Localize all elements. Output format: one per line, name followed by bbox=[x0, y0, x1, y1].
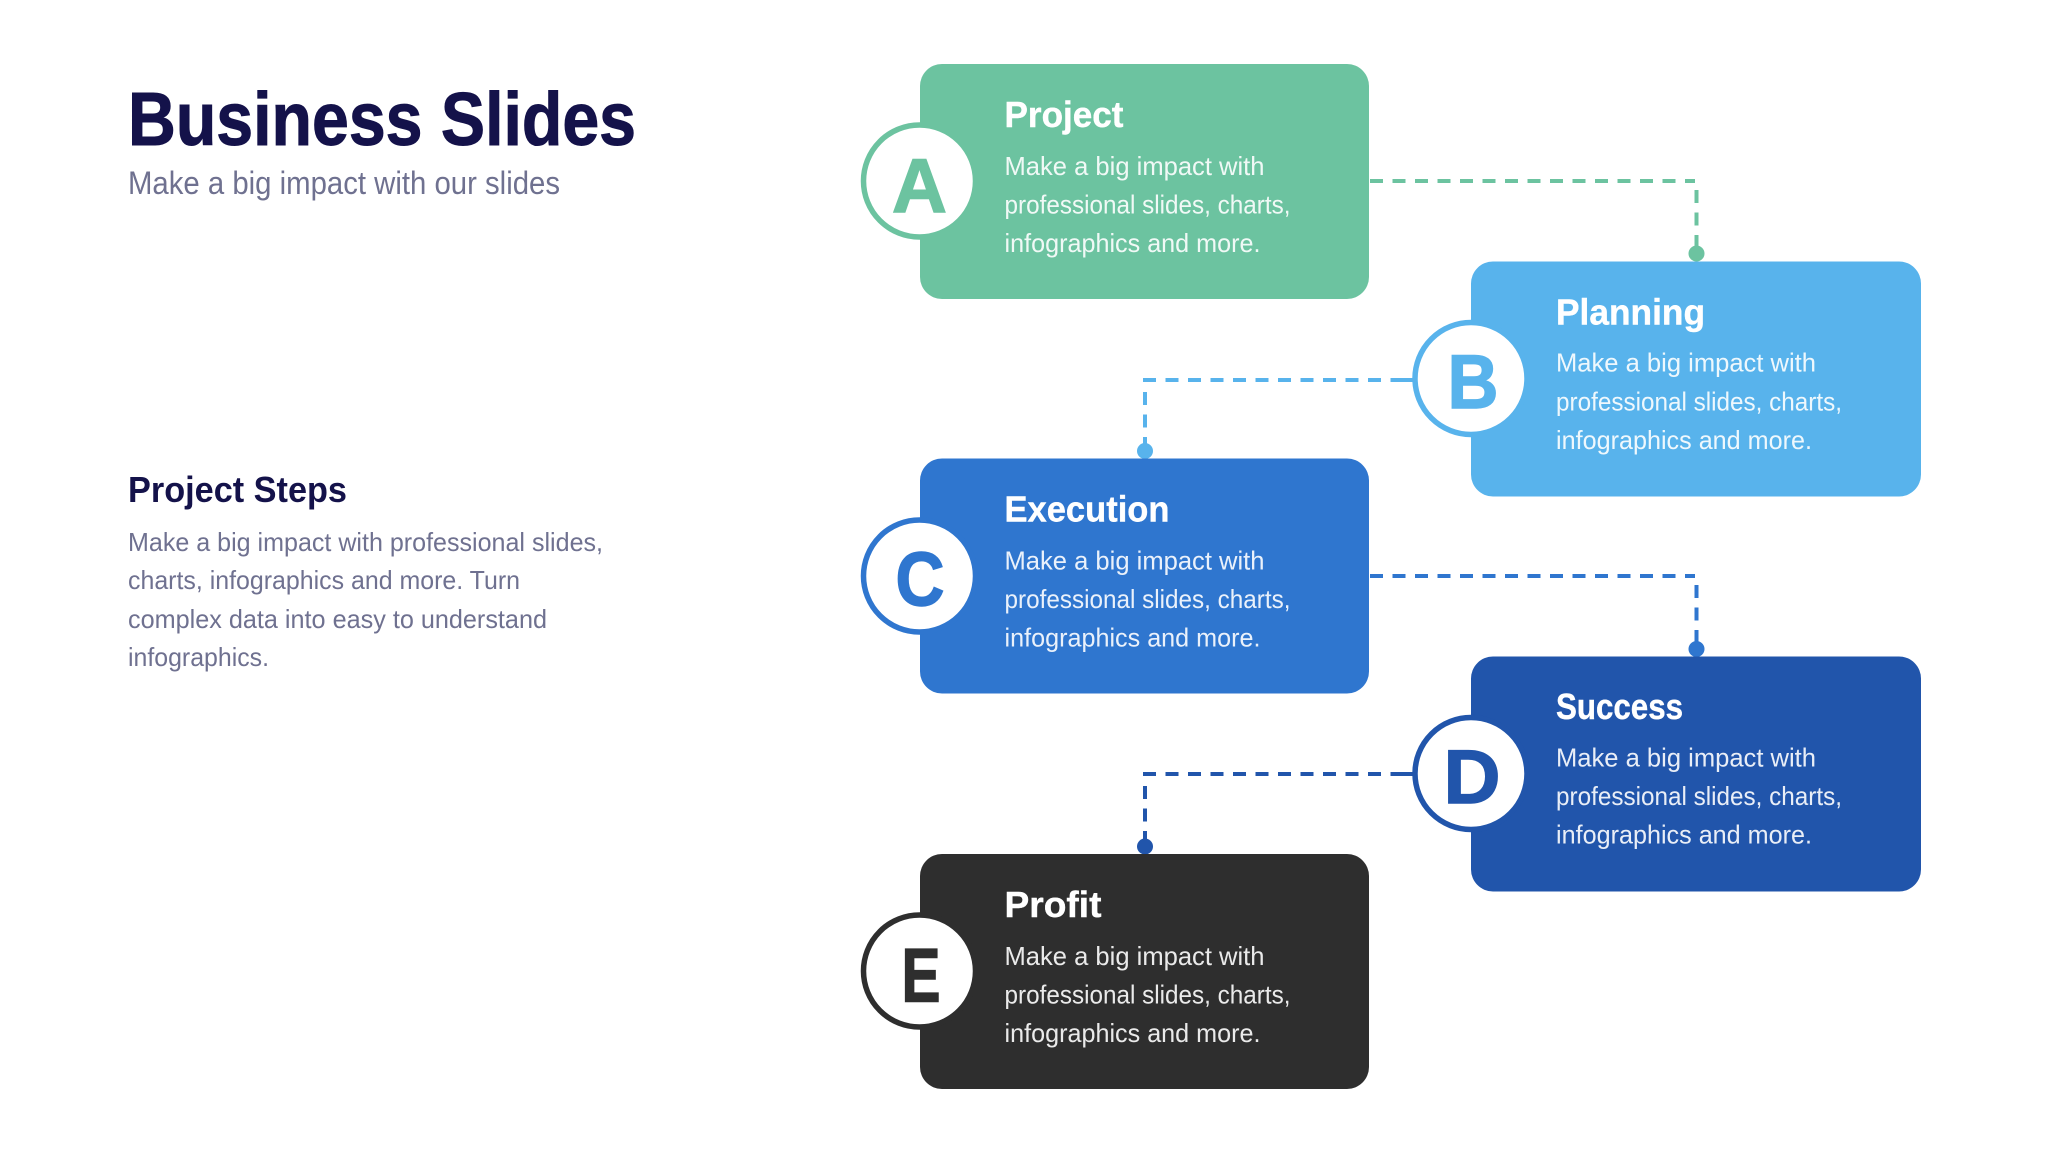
card text: success bbox=[1556, 742, 1842, 850]
arrow: planning to execution bbox=[1137, 380, 1414, 459]
card text: project: infographics and more. bbox=[1004, 228, 1260, 258]
text block: project steps description: infographics. bbox=[128, 642, 269, 672]
card text: execution: professional slides, charts, bbox=[1004, 584, 1290, 614]
card text: execution bbox=[1004, 546, 1290, 652]
card text: planning: infographics and more. bbox=[1556, 425, 1812, 455]
arrow: success to profit bbox=[1137, 774, 1414, 854]
icon: letter A badge bbox=[864, 125, 976, 237]
icon: letter C badge: C bbox=[896, 538, 944, 622]
card text: success: Make a big impact with bbox=[1556, 742, 1816, 772]
card text: planning: Make a big impact with bbox=[1556, 348, 1816, 378]
card text: execution: Make a big impact with bbox=[1004, 546, 1264, 576]
subtitle: Make a big impact with our slides bbox=[128, 165, 560, 201]
panel: planning bbox=[1415, 262, 1921, 496]
card text: profit: professional slides, charts, bbox=[1004, 980, 1290, 1010]
card text: planning bbox=[1556, 348, 1842, 455]
panel: project bbox=[864, 64, 1369, 299]
text block: project steps description: charts, infographics and more. Turn bbox=[128, 565, 520, 595]
icon: letter B badge: B bbox=[1448, 340, 1498, 425]
card text: profit: Make a big impact with bbox=[1004, 941, 1264, 971]
card text: success: infographics and more. bbox=[1556, 820, 1812, 850]
icon: letter C badge bbox=[864, 520, 976, 632]
title: Business Slides bbox=[128, 77, 636, 161]
text block: project steps description: complex data into easy to understand bbox=[128, 604, 547, 634]
card text: execution: infographics and more. bbox=[1004, 622, 1260, 652]
icon: letter A badge: A bbox=[892, 144, 947, 229]
arrow: execution to success bbox=[1370, 576, 1704, 657]
card text: success: professional slides, charts, bbox=[1556, 781, 1842, 811]
card text: project: professional slides, charts, bbox=[1004, 190, 1290, 220]
card text: profit bbox=[1004, 941, 1290, 1048]
card text: project bbox=[1004, 151, 1290, 258]
icon: letter B badge bbox=[1415, 322, 1527, 434]
card text: project: Make a big impact with bbox=[1004, 151, 1264, 181]
card heading: profit: Profit bbox=[1004, 884, 1102, 925]
section heading: project steps: Project Steps bbox=[128, 469, 347, 510]
card text: planning: professional slides, charts, bbox=[1556, 386, 1842, 416]
card text: profit: infographics and more. bbox=[1004, 1018, 1260, 1048]
icon: letter D badge bbox=[1415, 718, 1527, 830]
panel: execution bbox=[864, 458, 1369, 694]
text block: project steps description bbox=[128, 527, 603, 672]
card heading: project: Project bbox=[1004, 94, 1124, 135]
icon: letter E badge: E bbox=[902, 934, 940, 1018]
panel: success bbox=[1415, 656, 1921, 892]
panel: profit bbox=[864, 854, 1369, 1089]
icon: letter E badge bbox=[864, 915, 976, 1027]
card heading: execution: Execution bbox=[1004, 488, 1170, 530]
card heading: success: Success bbox=[1556, 686, 1683, 727]
icon: letter D badge: D bbox=[1444, 735, 1500, 820]
arrow: project to planning bbox=[1370, 181, 1704, 262]
card heading: planning: Planning bbox=[1556, 292, 1705, 332]
text block: project steps description: Make a big impact with professional slides, bbox=[128, 527, 603, 557]
